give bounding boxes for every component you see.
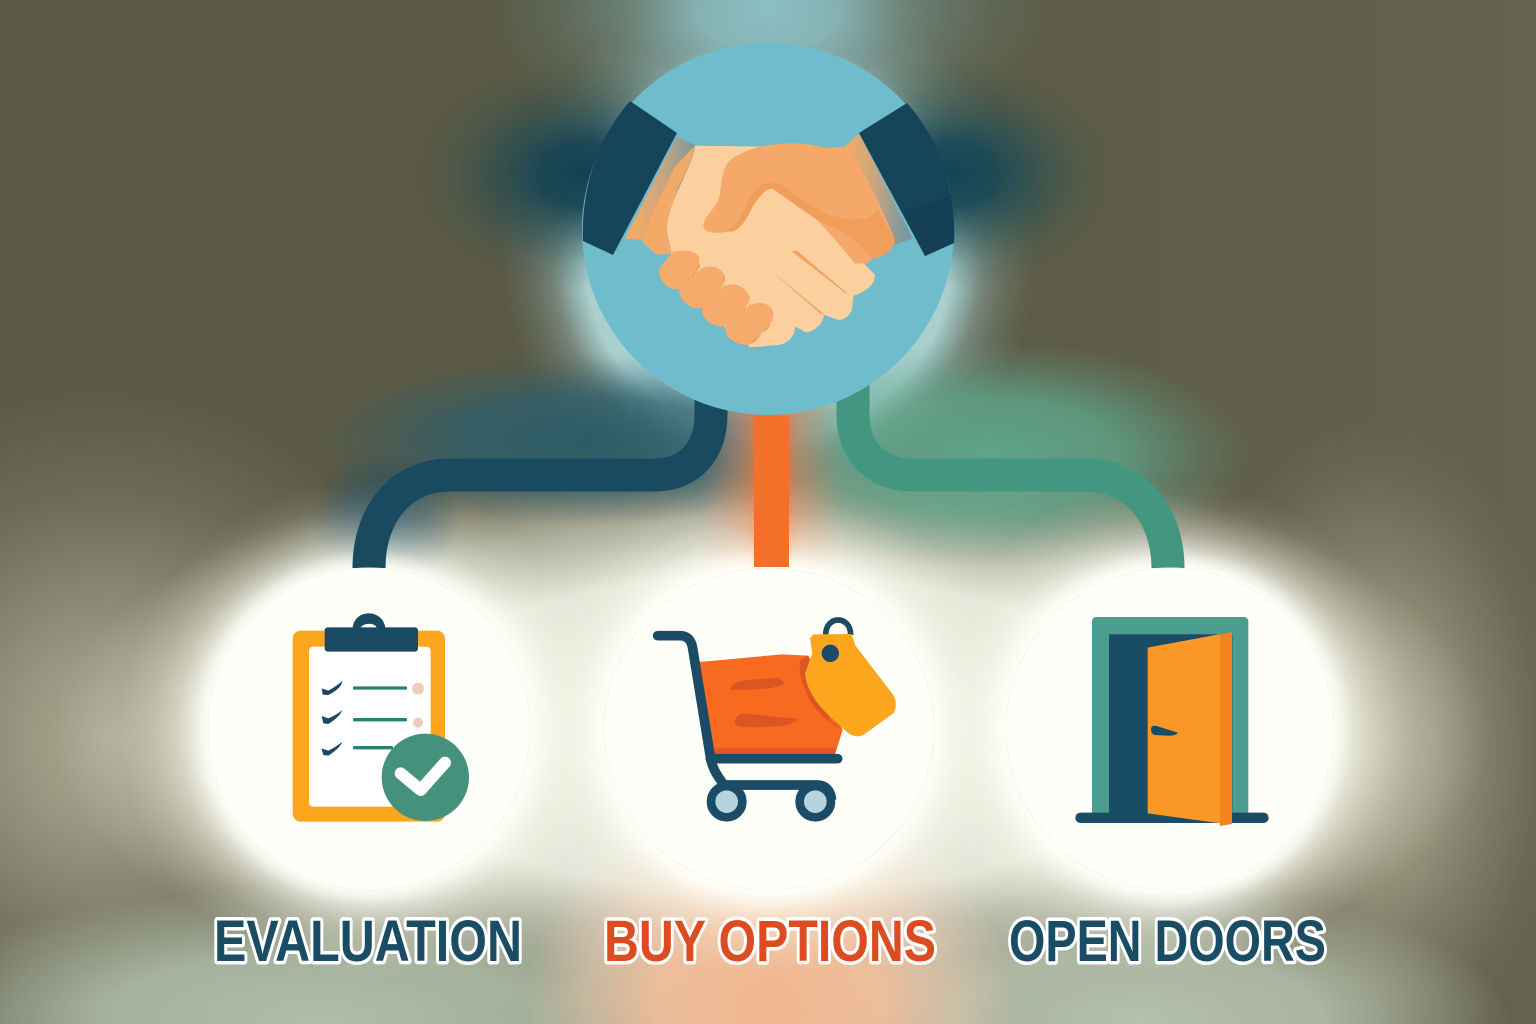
panel: open doors — [1006, 568, 1334, 890]
white circle — [604, 568, 934, 890]
partnership circle with handshake — [582, 43, 954, 415]
connector: evaluation — [369, 400, 711, 568]
heading: open doors: OPEN DOORS — [1009, 909, 1326, 974]
connector: buy options — [754, 416, 789, 567]
badge: green check — [382, 734, 469, 821]
left cuff — [583, 101, 677, 255]
icon: open door — [1075, 617, 1269, 826]
right cuff — [859, 103, 954, 256]
panel: evaluation — [208, 568, 530, 890]
icon: handshake — [625, 133, 913, 347]
heading: evaluation: EVALUATION — [214, 909, 522, 974]
heading: buy options: BUY OPTIONS — [604, 909, 936, 974]
icon: shopping cart — [658, 620, 896, 817]
panel: buy options — [604, 568, 934, 890]
white circle — [208, 568, 530, 890]
price tag — [805, 620, 896, 736]
teal circle — [582, 43, 954, 415]
connector: open doors — [853, 385, 1168, 568]
white circle — [1006, 568, 1334, 890]
icon: clipboard — [293, 613, 469, 822]
